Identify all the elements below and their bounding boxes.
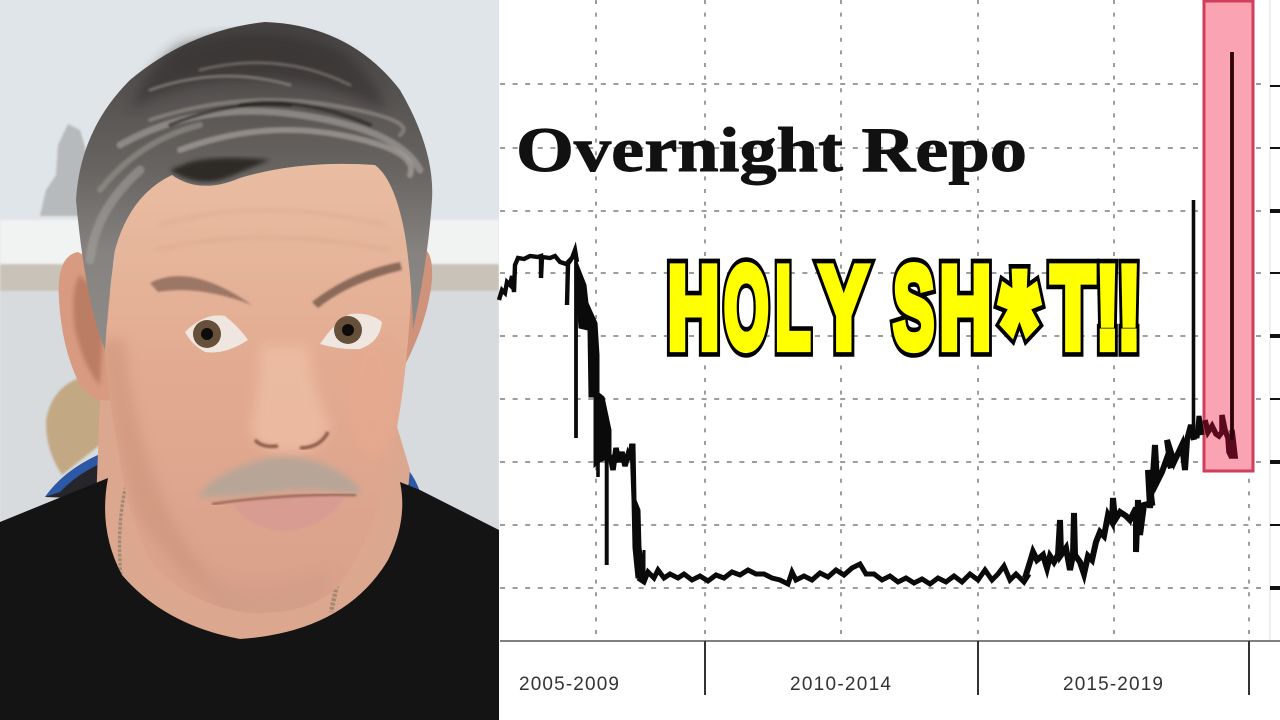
second descent <box>630 444 646 578</box>
headline: * <box>1000 237 1039 420</box>
descent block <box>577 262 611 467</box>
headline: Y <box>820 242 894 373</box>
headline: * <box>1000 237 1039 420</box>
section inside highlight <box>1205 415 1235 456</box>
long low section <box>638 564 1029 584</box>
eye: right <box>320 314 382 349</box>
grid lines <box>500 0 1268 640</box>
spike down 2008 <box>574 255 578 438</box>
headline: H <box>668 242 720 373</box>
tall spike <box>1230 52 1234 440</box>
headline: S <box>893 242 934 373</box>
headline <box>668 237 1141 420</box>
necklace <box>120 478 337 612</box>
headline: O <box>724 242 769 373</box>
panel: chart <box>499 0 1280 720</box>
headline: T!! <box>1051 242 1141 373</box>
hair <box>76 22 432 350</box>
rising section <box>1025 425 1194 578</box>
2009 plateau <box>610 444 632 470</box>
headline: L <box>775 242 810 373</box>
ears <box>59 252 112 401</box>
eye: left <box>185 315 248 352</box>
headline: T!! <box>1051 242 1141 373</box>
headline: H <box>939 242 991 373</box>
axis labels: 2015-2019 <box>1063 674 1163 695</box>
panel: presenter photo <box>0 0 499 720</box>
nose <box>250 345 330 452</box>
headline: L <box>775 242 810 373</box>
highlight box <box>1204 1 1253 471</box>
headline: Y <box>820 242 894 373</box>
headline: S <box>893 242 934 373</box>
mouth <box>212 495 356 531</box>
axis labels: 2005-2009 <box>519 674 619 695</box>
descent spikes <box>596 440 600 477</box>
chart title: Overnight Repo <box>516 115 1027 185</box>
face shading <box>106 340 227 606</box>
headline: H <box>668 242 720 373</box>
axis labels <box>519 674 1163 695</box>
chart axis <box>500 0 1280 695</box>
headline: H <box>939 242 991 373</box>
eyebrows <box>150 276 252 305</box>
spike 2019 <box>1192 200 1195 435</box>
repo rate line <box>499 52 1235 584</box>
headline: O <box>724 242 769 373</box>
neck <box>95 400 410 655</box>
stubble above lip <box>198 457 360 497</box>
early plateau <box>499 250 577 305</box>
black shirt <box>0 478 499 720</box>
axis labels: 2010-2014 <box>790 674 891 695</box>
chair <box>45 446 420 500</box>
face <box>105 164 413 613</box>
background shelf and objects <box>0 124 499 531</box>
